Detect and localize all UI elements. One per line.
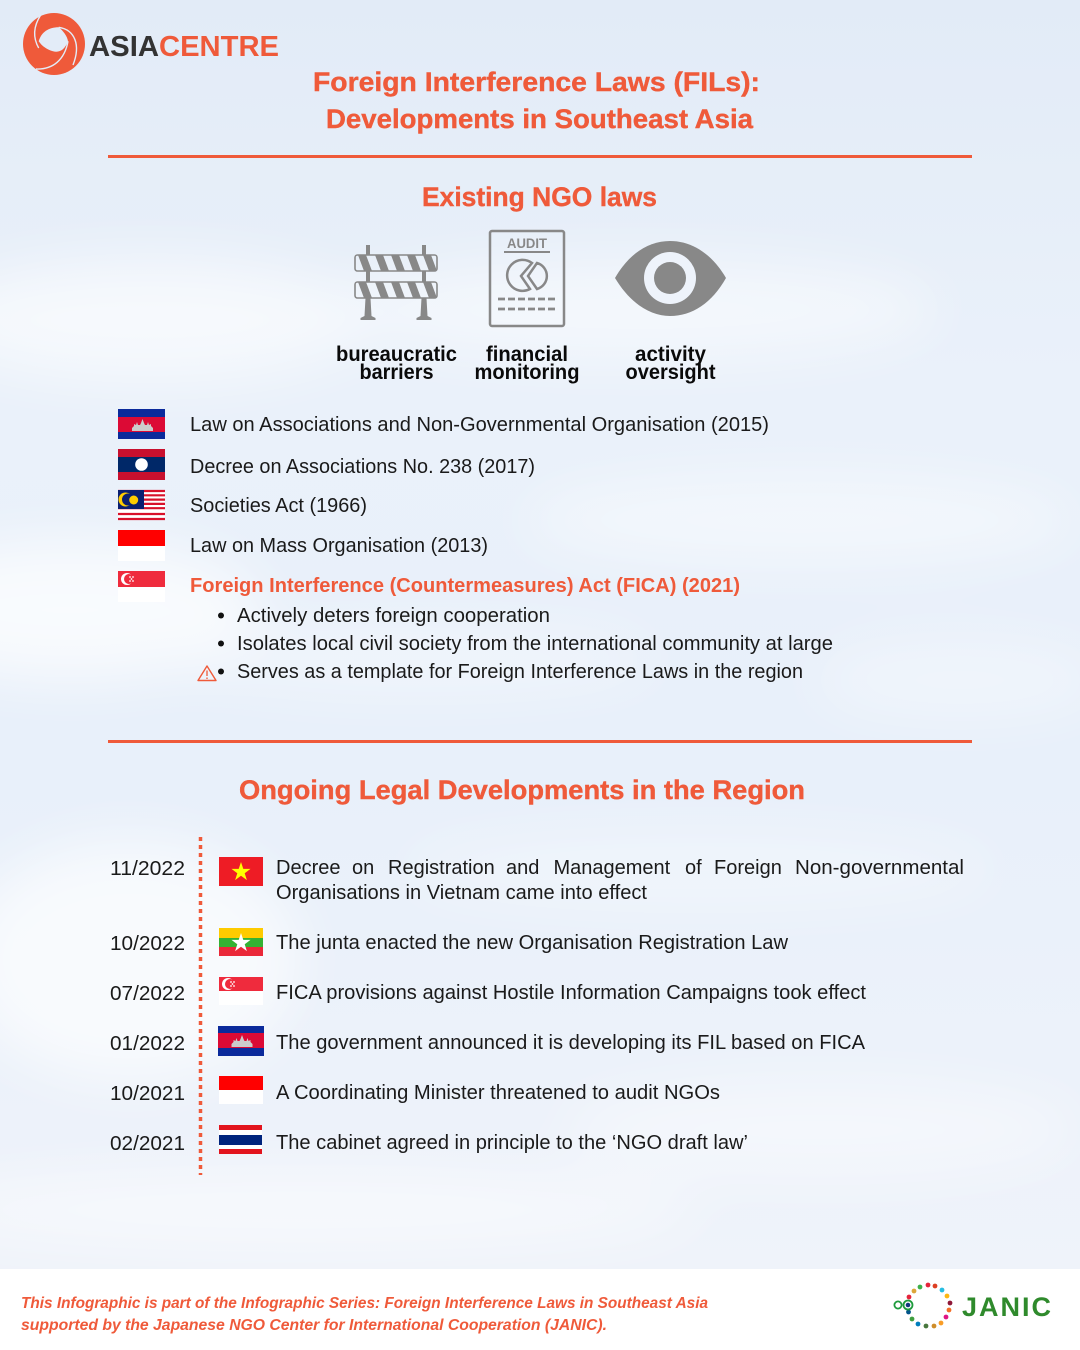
entry: 10/2022 Myanmar: 10/2022 [110,933,185,955]
logo: JANIC [894,1283,1051,1328]
footer note: supported by the Japanese NGO Center for International Cooperation (JANIC). [21,1317,607,1334]
logo: Asia Centre: ASIA [89,31,159,63]
entry: 01/2022 Cambodia: The government announced it is developing its FIL based on FICA [276,1032,866,1054]
law: Cambodia: Law on Associations and Non-Governmental Organisation (2015) [190,414,769,436]
title: Developments in Southeast Asia [326,104,754,134]
entry: 11/2022 Vietnam: Management [554,857,671,879]
icon labels: activity [635,343,706,366]
flag: Indonesia [118,530,165,561]
law: Malaysia: Societies Act (1966) [190,495,367,517]
entry: 02/2021 Thailand: 02/2021 [110,1133,185,1155]
icon: eye [615,241,726,316]
law: Laos: Decree on Associations No. 238 (2017) [190,456,535,478]
law: Indonesia: Law on Mass Organisation (2013) [190,535,488,557]
footer note [21,1295,708,1334]
logo: Asia Centre [23,13,279,75]
heading: Existing NGO laws: Existing NGO laws [422,182,657,212]
icon labels: oversight [626,361,716,384]
flag: Laos [118,449,165,480]
entry: 10/2022 Myanmar [110,928,789,956]
law: Singapore FICA: Foreign Interference (Countermeasures) Act (FICA) (2021) [190,575,740,597]
entry: 11/2022 Vietnam: Non-governmental [795,857,964,879]
entry: 10/2022 Myanmar: The junta enacted the new Organisation Registration Law [276,932,789,954]
entry: 11/2022 Vietnam: Foreign [714,857,782,879]
icon: road barrier [355,245,437,320]
entry: 01/2022 Cambodia: 01/2022 [110,1033,185,1055]
flag: Singapore [118,571,165,602]
title [313,67,760,134]
FICA effects list: Actively deters foreign cooperation [237,605,550,627]
flag: Cambodia [118,409,165,439]
entry: 02/2021 Thailand [110,1125,748,1155]
icon labels: bureaucratic [336,343,457,366]
title: Foreign Interference Laws (FILs): [313,67,760,97]
entry: 10/2021 Indonesia: 10/2021 [110,1083,185,1105]
entry: 07/2022 Singapore: 07/2022 [110,983,185,1005]
entry: 11/2022 Vietnam: of [685,857,702,879]
footer band [0,1269,1080,1350]
icon: warning triangle [198,666,216,680]
icon labels [336,343,716,384]
FICA effects list [218,605,833,683]
logo: JANIC: JANIC [962,1292,1051,1322]
FICA effects list: Serves as a template for Foreign Interference Laws in the region [237,661,803,683]
entry: 11/2022 Vietnam: on [352,857,374,879]
entry: 11/2022 Vietnam: 11/2022 [110,858,185,880]
timeline dotted line [199,837,202,1175]
entry: 07/2022 Singapore [110,977,866,1005]
footer note: This Infographic is part of the Infographic Series: Foreign Interference Laws in Southeast Asia [21,1295,708,1312]
entry: 11/2022 Vietnam: and [506,857,539,879]
icon labels: monitoring [474,361,580,384]
icon: audit document: AUDIT [507,235,547,251]
entry: 11/2022 Vietnam: Registration [388,857,495,879]
flag: Malaysia [118,490,165,520]
entry: 01/2022 Cambodia [110,1026,866,1056]
entry: 11/2022 Vietnam [110,857,964,904]
entry: 11/2022 Vietnam: Organisations in Vietnam came into effect [276,882,647,904]
entry: 10/2021 Indonesia [110,1076,720,1105]
entry: 11/2022 Vietnam: Decree [276,857,340,879]
icon labels: barriers [360,361,434,384]
icon: audit document [490,231,564,326]
heading: Ongoing Legal Developments: Ongoing Legal Developments in the Region [239,775,805,805]
entry: 10/2021 Indonesia: A Coordinating Minister threatened to audit NGOs [276,1082,720,1104]
FICA effects list: Isolates local civil society from the international community at large [237,633,833,655]
icon labels: financial [486,343,568,366]
entry: 02/2021 Thailand: The cabinet agreed in principle to the ‘NGO draft law’ [276,1132,748,1154]
entry: 07/2022 Singapore: FICA provisions against Hostile Information Campaigns took effect [276,982,866,1004]
logo: Asia Centre: CENTRE [159,31,279,63]
